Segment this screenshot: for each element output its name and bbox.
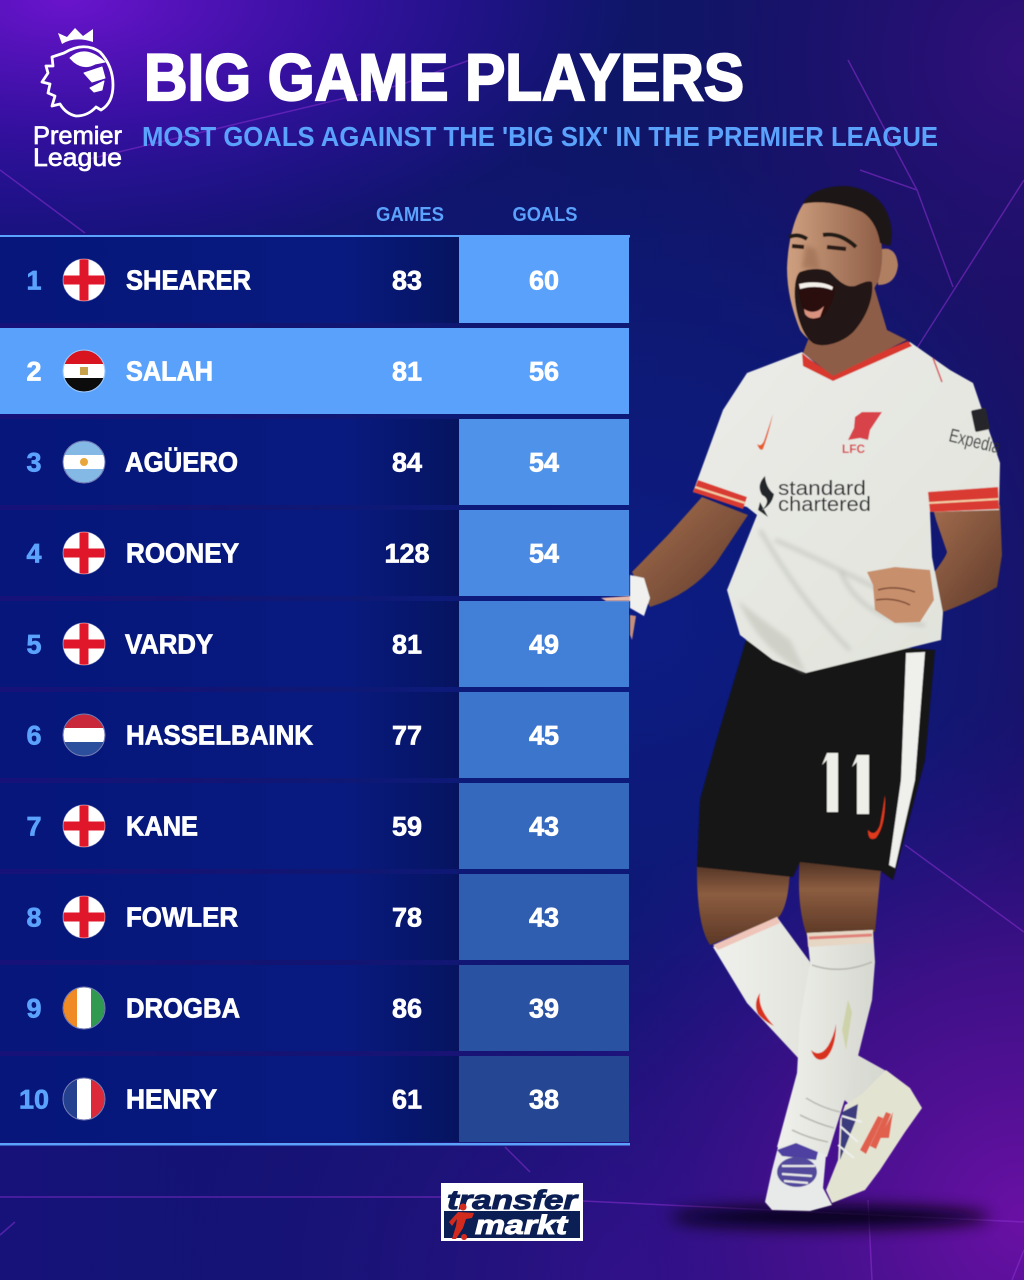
row 1: Shearer [0, 237, 629, 323]
row 9: Drogba: DROGBA [126, 992, 240, 1024]
row 2: Salah [0, 328, 629, 414]
row 8: Fowler: FOWLER [126, 902, 238, 932]
row 4: Rooney [0, 510, 629, 596]
collar [802, 341, 912, 381]
sleeve band: right [928, 487, 999, 512]
row 6: Hasselbaink: 45 [529, 720, 559, 750]
flag: England [63, 623, 105, 665]
flag: England [63, 259, 105, 301]
row 5: Vardy [0, 601, 629, 687]
sleeve band: left [693, 480, 747, 509]
row 2: Salah: SALAH [126, 356, 213, 386]
column header: games: GAMES [376, 204, 444, 226]
bottom rule [0, 1143, 630, 1146]
row 4: Rooney: 128 [384, 538, 430, 568]
boot: back [826, 1070, 922, 1203]
icon: crown [58, 28, 93, 44]
column header: goals: GOALS [512, 204, 578, 226]
arm: viewer left [601, 497, 748, 640]
player photo illustration: Salah [601, 186, 1003, 1211]
row 1: Shearer: 60 [529, 266, 559, 296]
row 8: Fowler: 78 [392, 902, 422, 932]
row 1: Shearer: 1 [26, 266, 42, 296]
row 4: Rooney: 4 [26, 538, 42, 568]
front leg [777, 858, 882, 1157]
hand [867, 567, 934, 623]
head [787, 186, 907, 376]
wordmark: Premier [33, 122, 122, 150]
back leg and boot [697, 860, 922, 1203]
row 7: Kane: KANE [126, 810, 198, 842]
title: BIG GAME PLAYERS [144, 40, 744, 114]
arm: viewer right [920, 505, 1002, 612]
flag: England [63, 532, 105, 574]
row 2: Salah: 81 [392, 356, 422, 386]
row 2: Salah: 56 [529, 356, 559, 386]
logo: Premier League [33, 28, 122, 172]
crest: Liverpool [842, 412, 882, 456]
icon: red footballer [449, 1204, 474, 1240]
row 4: Rooney: ROONEY [126, 538, 239, 568]
row 1: Shearer: SHEARER [126, 264, 251, 296]
sponsor: Standard Chartered: chartered [778, 494, 871, 516]
flag: England [63, 896, 105, 938]
jersey [693, 341, 1003, 673]
logo: Transfermarkt: markt [475, 1210, 568, 1240]
flag: England [63, 805, 105, 847]
row 9: Drogba: 39 [529, 994, 559, 1024]
mouth [798, 282, 835, 320]
shorts [697, 637, 935, 880]
row 7: Kane: 43 [529, 812, 559, 842]
flag: Argentina [63, 441, 105, 483]
row 10: Henry: 61 [392, 1084, 422, 1114]
flag: Netherlands [63, 714, 105, 756]
ground shadow [670, 1206, 990, 1228]
flag: France [63, 1078, 105, 1120]
row 9: Drogba: 86 [392, 994, 422, 1024]
row 9: Drogba: 9 [26, 994, 42, 1024]
row 5: Vardy: 81 [392, 630, 422, 660]
row 6: Hasselbaink: 77 [392, 720, 422, 750]
sponsor: Standard Chartered: standard [778, 478, 866, 500]
sponsor: Expedia [947, 408, 1003, 459]
row 7: Kane: 7 [26, 812, 42, 842]
sponsor: Expedia: Expedia [947, 425, 1003, 459]
row 7: Kane: 59 [392, 812, 422, 842]
row 3: Aguero: 54 [529, 448, 559, 478]
row 10: Henry: 38 [529, 1084, 559, 1114]
boot: front [765, 1143, 832, 1211]
face [787, 201, 882, 344]
subtitle: MOST GOALS AGAINST THE 'BIG SIX' IN THE PREMIER LEAGUE [142, 121, 938, 152]
logo: Premier League: League [33, 144, 122, 172]
row 3: Aguero [0, 419, 629, 505]
row 4: Rooney: 54 [529, 538, 559, 568]
beard [795, 269, 872, 345]
row 5: Vardy: 49 [529, 630, 559, 660]
logo: Transfermarkt [441, 1183, 583, 1241]
row 6: Hasselbaink: HASSELBAINK [126, 720, 313, 750]
row 3: Aguero: 3 [26, 448, 42, 478]
icon: lion head [42, 47, 113, 116]
row 8: Fowler [0, 874, 629, 960]
row 6: Hasselbaink [0, 692, 629, 778]
row 10: Henry: HENRY [126, 1084, 217, 1114]
row 5: Vardy: 5 [26, 630, 42, 660]
top rule [0, 235, 630, 238]
sponsor: Standard Chartered [778, 478, 871, 516]
crest: Liverpool: LFC [842, 442, 865, 456]
row 1: Shearer: 83 [392, 266, 422, 296]
flag: Egypt [63, 350, 105, 392]
row 3: Aguero: 84 [392, 448, 422, 478]
row 6: Hasselbaink: 6 [26, 720, 42, 750]
swoosh [757, 414, 773, 450]
flag: Ivory Coast [63, 987, 105, 1029]
row 10: Henry [0, 1056, 629, 1142]
ear [878, 249, 898, 285]
row 8: Fowler: 8 [26, 902, 42, 932]
row 3: Aguero: AGÜERO [125, 446, 238, 478]
row 10: Henry: 10 [19, 1084, 49, 1114]
hair [803, 186, 892, 246]
nose shadow [802, 245, 820, 270]
row 9: Drogba [0, 965, 629, 1051]
eyes and brows [789, 234, 856, 247]
neck [803, 283, 907, 376]
row 5: Vardy: VARDY [125, 628, 213, 660]
table rows [0, 237, 629, 1142]
row 7: Kane [0, 783, 629, 869]
row 8: Fowler: 43 [529, 902, 559, 932]
sponsor mark [758, 476, 774, 517]
logo: Transfermarkt: transfer [447, 1185, 579, 1215]
row 2: Salah: 2 [26, 356, 42, 386]
